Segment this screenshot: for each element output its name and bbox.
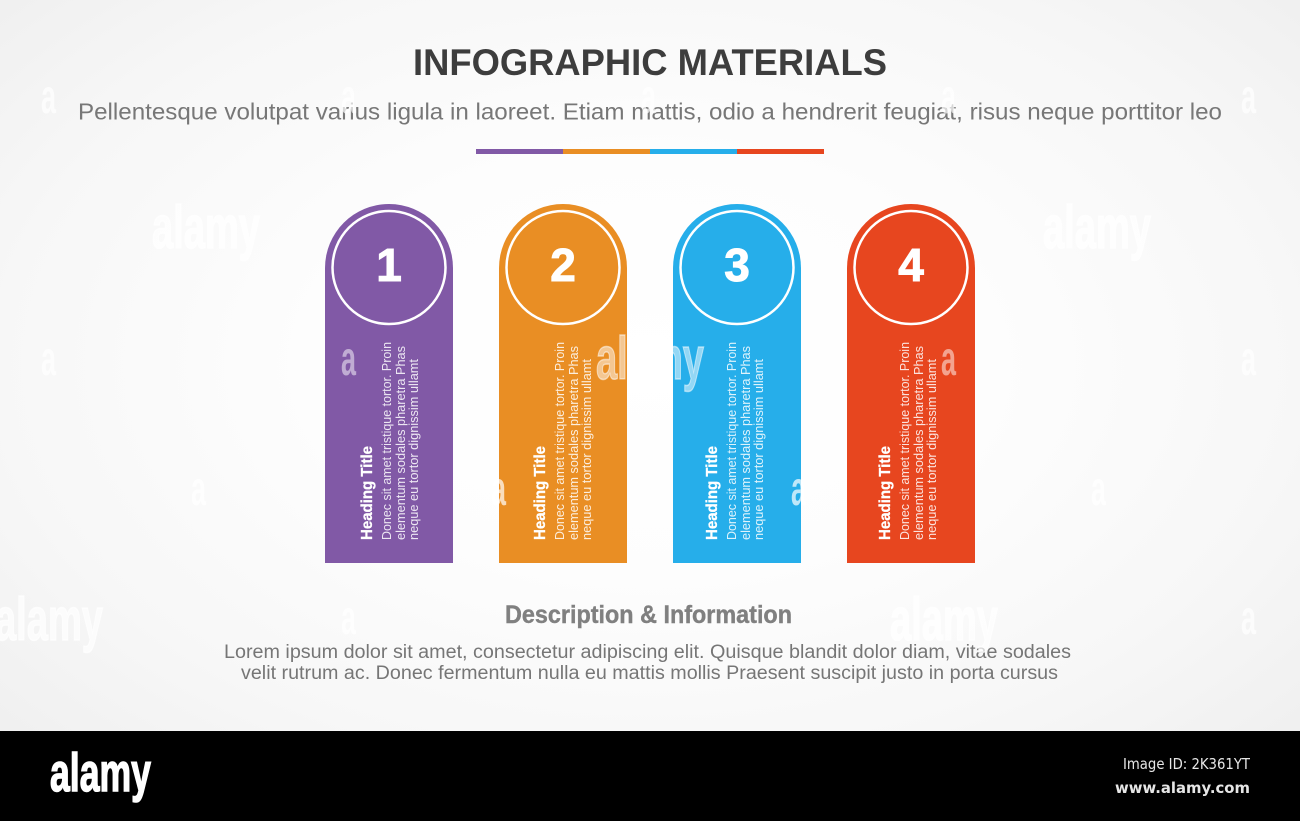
- watermarks: a: [41, 71, 56, 124]
- footer bar: [0, 731, 1300, 821]
- card 3 heading: Heading Title: [704, 446, 721, 540]
- watermarks: a: [1241, 71, 1256, 124]
- description text: [224, 642, 1071, 684]
- panel: card 2: [499, 204, 627, 563]
- panel: card 3: [673, 204, 801, 563]
- description text: velit rutrum ac. Donec fermentum nulla eu mattis mollis Praesent suscipit justo in porta cursus: [241, 663, 1058, 684]
- watermarks: a: [491, 463, 506, 516]
- card 2 body text: Donec sit amet tristique tortor. Proin: [553, 342, 567, 540]
- watermarks: a: [641, 71, 656, 124]
- card 4 shape: [847, 204, 975, 563]
- card 1 body text: [380, 342, 421, 540]
- watermarks: a: [341, 333, 356, 386]
- card 4 body text: elementum sodales pharetra Phas: [912, 346, 926, 540]
- card 1 shape: [325, 204, 453, 563]
- card 3 body text: elementum sodales pharetra Phas: [739, 346, 753, 540]
- card 1 heading: Heading Title: [359, 446, 376, 540]
- watermarks: a: [341, 71, 356, 124]
- card 2 number badge: 2: [550, 239, 576, 291]
- watermarks: a: [341, 592, 356, 645]
- card 4 heading: Heading Title: [877, 446, 894, 540]
- watermarks: a: [941, 71, 956, 124]
- watermarks: a: [791, 463, 806, 516]
- panel: card 4: [847, 204, 975, 563]
- watermarks: alamy: [890, 586, 998, 653]
- card 1 number badge: 1: [376, 239, 402, 291]
- card 3 body text: neque eu tortor dignissim ullamt: [752, 358, 766, 540]
- card 3 shape: [673, 204, 801, 563]
- watermarks: alamy: [152, 194, 260, 261]
- card 3 body text: [725, 342, 766, 540]
- image id: Image ID: 2K361YT: [1123, 755, 1251, 773]
- card 1 body text: Donec sit amet tristique tortor. Proin: [380, 342, 394, 540]
- watermarks: alamy: [1043, 194, 1151, 261]
- watermarks: [0, 71, 1256, 653]
- card 1 body text: neque eu tortor dignissim ullamt: [407, 358, 421, 540]
- card 2 heading: Heading Title: [532, 446, 549, 540]
- watermarks: a: [941, 333, 956, 386]
- card 3 number badge: [680, 211, 794, 324]
- card 2 number badge: [506, 211, 620, 324]
- colored divider bar: [476, 149, 824, 154]
- watermarks: alamy: [596, 325, 704, 392]
- website: www.alamy.com: [1115, 779, 1250, 797]
- card 2 body text: [553, 342, 594, 540]
- footer logo: alamy: [50, 743, 151, 803]
- watermarks: alamy: [0, 586, 103, 653]
- card 3 number badge: 3: [724, 239, 750, 291]
- watermarks: a: [191, 463, 206, 516]
- card 2 body text: elementum sodales pharetra Phas: [567, 346, 581, 540]
- watermarks: a: [41, 333, 56, 386]
- card 2 shape: [499, 204, 627, 563]
- watermarks: a: [1241, 592, 1256, 645]
- card 1 body text: elementum sodales pharetra Phas: [394, 346, 408, 540]
- title: INFOGRAPHIC MATERIALS: [413, 42, 887, 83]
- description heading: Description & Information: [505, 601, 792, 629]
- card 4 number badge: 4: [898, 239, 924, 291]
- card 4 body text: neque eu tortor dignissim ullamt: [925, 358, 939, 540]
- card 4 body text: Donec sit amet tristique tortor. Proin: [898, 342, 912, 540]
- watermarks: a: [1241, 333, 1256, 386]
- panel: card 1: [325, 204, 453, 563]
- card 4 number badge: [854, 211, 968, 324]
- card 4 body text: [898, 342, 939, 540]
- subtitle: Pellentesque volutpat varius ligula in laoreet. Etiam mattis, odio a hendrerit feugiat, risus neque porttitor leo: [78, 98, 1222, 124]
- card 2 body text: neque eu tortor dignissim ullamt: [580, 358, 594, 540]
- description text: Lorem ipsum dolor sit amet, consectetur adipiscing elit. Quisque blandit dolor diam, vitae sodales: [224, 642, 1071, 663]
- watermarks: a: [1091, 463, 1106, 516]
- card 1 number badge: [332, 211, 446, 324]
- card 3 body text: Donec sit amet tristique tortor. Proin: [725, 342, 739, 540]
